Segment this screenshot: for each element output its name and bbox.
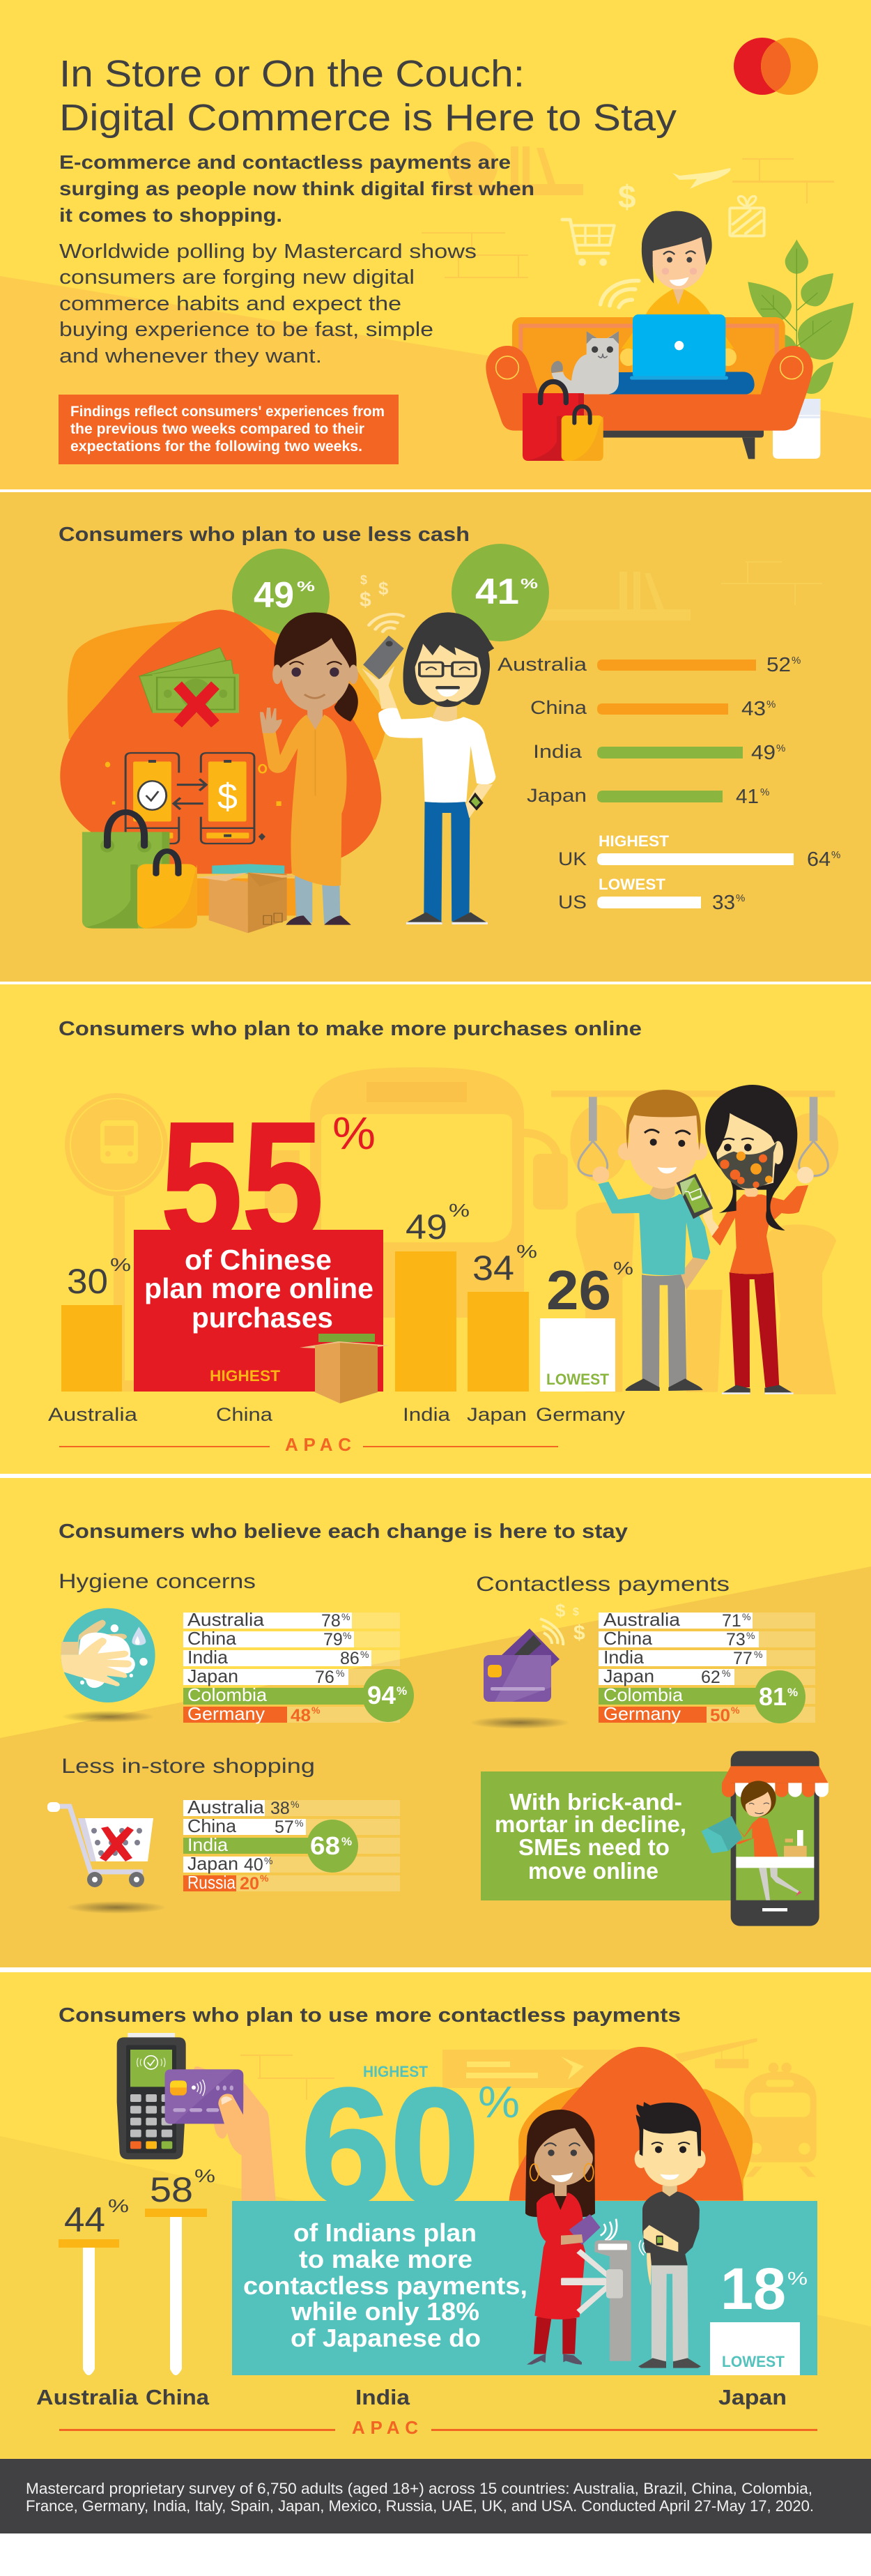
APAC bracket <box>59 2417 817 2438</box>
panel: contactless payments <box>0 1972 871 2459</box>
bar chart: less cash by country: 64 <box>807 848 831 871</box>
APAC bracket: APAC <box>285 1434 351 1455</box>
bar: China: % <box>194 2165 215 2186</box>
subtitle: E-commerce and contactless payments are <box>59 151 511 173</box>
panel: less cash <box>0 492 871 982</box>
icon: hand washing <box>61 1608 155 1723</box>
table: hygiene concerns: Japan <box>187 1666 238 1686</box>
table: less in-store shopping: % <box>264 1855 272 1866</box>
table: contactless payments: Australia <box>603 1609 681 1630</box>
bar: India: 49 <box>406 1207 447 1247</box>
table: contactless payments: 62 <box>701 1668 720 1687</box>
cat <box>551 331 619 395</box>
bar chart: less cash by country: 52 <box>766 654 791 676</box>
bar chart: less cash by country <box>498 654 840 914</box>
table: contactless payments: % <box>754 1649 762 1660</box>
subheading: Less in-store shopping <box>61 1755 315 1778</box>
axis labels: China <box>146 2385 210 2409</box>
bar: Germany lowest: 26 <box>546 1259 611 1321</box>
table: contactless payments: 73 <box>726 1630 746 1649</box>
bar: India <box>395 1200 470 1392</box>
table: less in-store shopping: 68 <box>310 1831 340 1860</box>
illustration: man with phone <box>362 612 495 924</box>
table: less in-store shopping: China <box>187 1815 237 1836</box>
bar: India: % <box>449 1200 470 1221</box>
icon: payment terminal with card <box>117 2033 276 2201</box>
table: hygiene concerns: % <box>396 1684 407 1698</box>
bar chart: less cash by country: Australia <box>498 654 587 675</box>
bar chart: less cash by country: % <box>831 849 840 861</box>
heading: Consumers who believe each change is here to stay <box>59 1521 628 1543</box>
icon: airplane and dollar: $ <box>618 178 636 215</box>
icon: dollar on phone screen: $ <box>217 777 238 817</box>
table: contactless payments: Germany <box>603 1703 681 1724</box>
background: train and blob <box>509 2038 817 2201</box>
subtitle: it comes to shopping. <box>59 204 282 226</box>
axis labels: India <box>355 2385 410 2409</box>
icon: contactless card: $ <box>573 1606 579 1618</box>
table: contactless payments: % <box>787 1686 798 1699</box>
table: less in-store shopping: 57 <box>275 1817 294 1837</box>
intro text <box>59 241 477 367</box>
icon: shopping bags <box>82 812 197 929</box>
table: contactless payments: 50 <box>710 1706 730 1725</box>
table: hygiene concerns: % <box>341 1611 350 1622</box>
bar: Australia <box>59 2195 129 2375</box>
table: hygiene concerns: 94 <box>367 1681 396 1709</box>
table: contactless payments: 71 <box>722 1611 741 1631</box>
bar chart: less cash by country: 33 <box>712 892 735 914</box>
icon: dollar signs: $ <box>360 573 367 587</box>
callout: findings note: the previous two weeks compared to their <box>70 421 364 437</box>
stat: India highest 60% <box>232 2055 817 2375</box>
table: contactless payments: % <box>742 1611 750 1622</box>
subheading: Contactless payments <box>476 1573 730 1596</box>
table: hygiene concerns: Colombia <box>187 1684 268 1705</box>
man with smartwatch <box>635 2102 706 2368</box>
table: less in-store shopping: % <box>341 1835 352 1848</box>
bar chart: less cash by country: LOWEST <box>599 876 666 893</box>
icon: cardboard box <box>196 864 299 933</box>
axis labels: Australia <box>48 1404 138 1425</box>
table: hygiene concerns: India <box>187 1647 229 1668</box>
heading: Consumers who plan to use more contactless payments <box>59 2004 681 2027</box>
bar chart: less cash by country: % <box>766 699 776 710</box>
bar: China highest: HIGHEST <box>210 1367 281 1385</box>
bar chart: less cash by country: 49 <box>751 742 776 764</box>
bar: Australia: % <box>108 2195 129 2216</box>
stat: India highest 60%: % <box>478 2077 520 2127</box>
table: hygiene concerns: 78 <box>321 1611 341 1631</box>
bar chart: less cash by country: % <box>760 786 769 798</box>
panel: here to stay <box>0 1478 871 1967</box>
callout: SMEs need to move online: With brick-and- <box>509 1789 682 1815</box>
icon: dollar signs: $ <box>360 588 371 611</box>
axis labels: Germany <box>536 1404 626 1425</box>
icon: phones exchanging payment <box>105 753 282 844</box>
table: contactless payments: % <box>746 1630 755 1641</box>
table: contactless payments: 81 <box>759 1682 787 1711</box>
table: contactless payments: China <box>603 1628 653 1649</box>
table: less in-store shopping: % <box>295 1817 303 1829</box>
axis labels <box>48 1404 626 1425</box>
turnstile <box>561 2240 631 2361</box>
bar: China highest: 55 <box>161 1087 323 1277</box>
straps <box>578 1097 828 1176</box>
panel: intro <box>0 0 871 489</box>
table: contactless payments: India <box>603 1647 645 1668</box>
bar: Japan: 34 <box>472 1249 514 1288</box>
intro text: Worldwide polling by Mastercard shows <box>59 241 477 263</box>
bar chart: less cash by country: % <box>776 742 785 754</box>
icon: contactless card <box>470 1600 585 1729</box>
table: less in-store shopping: % <box>260 1873 269 1884</box>
callout: SMEs need to move online <box>481 1771 739 1900</box>
bar: China highest <box>134 1087 383 1392</box>
table: hygiene concerns: China <box>187 1628 237 1649</box>
axis labels: Japan <box>467 1404 527 1425</box>
stat: India highest 60%: contactless payments, <box>243 2271 527 2300</box>
background: bus stop and bus <box>65 1067 568 1392</box>
table: less in-store shopping <box>183 1797 400 1893</box>
axis labels: Japan <box>718 2385 787 2409</box>
table: hygiene concerns: 48 <box>291 1706 311 1725</box>
stat: India highest 60%: while only 18% <box>291 2297 479 2326</box>
footer: survey note: Mastercard proprietary survey of 6,750 adults (aged 18+) across 15 countries: Australia, Brazil, China, Colombia, <box>26 2480 812 2497</box>
bar: China highest: plan more online <box>144 1272 373 1304</box>
icon: wifi <box>369 614 403 632</box>
stat: India highest 60%: HIGHEST <box>363 2063 429 2080</box>
bar: Japan <box>468 1241 537 1392</box>
icon: airplane and dollar <box>618 168 731 215</box>
icons: cart, gift and wifi <box>562 196 764 307</box>
table: less in-store shopping: 20 <box>240 1874 259 1893</box>
bar chart: less cash by country: HIGHEST <box>599 832 670 850</box>
stat: India highest 60%: of Japanese do <box>291 2324 481 2352</box>
woman <box>702 1085 814 1394</box>
icon: dollar signs <box>360 573 389 611</box>
table: hygiene concerns: % <box>336 1668 344 1679</box>
intro text: commerce habits and expect the <box>59 293 401 315</box>
background: rail sign and line <box>240 2050 624 2100</box>
bar: Germany lowest: LOWEST <box>546 1371 610 1388</box>
callout: findings note: Findings reflect consumers' experiences from <box>70 404 385 420</box>
icon: phone storefront <box>702 1751 828 1926</box>
axis labels: India <box>403 1404 451 1425</box>
table: less in-store shopping: India <box>187 1834 229 1855</box>
stat: Japan lowest 18% <box>710 2256 808 2375</box>
bar: Germany lowest <box>540 1258 633 1392</box>
heading: Consumers who plan to use less cash <box>59 524 470 546</box>
stat: India highest 60%: of Indians plan <box>293 2218 477 2247</box>
stat: India highest 60%: to make more <box>299 2245 472 2273</box>
stat: woman 49% <box>232 549 330 646</box>
intro text: consumers are forging new digital <box>59 266 415 289</box>
stat: woman 49%: % <box>297 579 315 595</box>
title: Digital Commerce is Here to Stay <box>59 97 677 139</box>
subtitle: surging as people now think digital first when <box>59 178 534 199</box>
woman paying <box>525 2110 617 2365</box>
axis labels: China <box>216 1404 273 1425</box>
stat: man 41%: 41 <box>475 572 519 612</box>
title <box>59 53 677 139</box>
intro text: and whenever they want. <box>59 345 322 367</box>
bar: Australia <box>61 1254 131 1392</box>
table: contactless payments: Colombia <box>603 1684 684 1705</box>
stat: woman 49%: 49 <box>254 575 294 616</box>
bar chart: less cash by country: % <box>736 892 745 904</box>
table: contactless payments: 77 <box>733 1649 753 1668</box>
person <box>608 211 755 395</box>
background blob <box>60 609 387 915</box>
icon: shopping cart crossed out <box>47 1802 167 1914</box>
bar: Australia: 44 <box>64 2200 105 2239</box>
title: In Store or On the Couch: <box>59 53 525 95</box>
subtitle <box>59 151 534 226</box>
bar: Australia: 30 <box>67 1262 108 1301</box>
stat: India highest 60%: 60 <box>301 2055 479 2239</box>
table: contactless payments <box>599 1609 815 1725</box>
table: hygiene concerns: % <box>360 1649 369 1660</box>
callout: SMEs need to move online: move online <box>528 1858 658 1884</box>
bar chart: less cash by country: 41 <box>736 786 759 808</box>
table: less in-store shopping: 40 <box>244 1855 263 1875</box>
bar chart: less cash by country: 43 <box>741 698 766 720</box>
heading: Consumers who plan to make more purchases online <box>59 1018 642 1040</box>
table: hygiene concerns: % <box>311 1705 321 1716</box>
bar: China <box>145 2165 215 2375</box>
shopping bags <box>523 381 603 461</box>
stat: Japan lowest 18%: 18 <box>720 2256 786 2322</box>
bar: Germany lowest: % <box>613 1258 633 1279</box>
couch back <box>512 317 785 459</box>
callout: SMEs need to move online: SMEs need to <box>518 1834 670 1860</box>
footer: survey note <box>0 2459 871 2533</box>
icon: parcel box <box>300 1334 390 1403</box>
icon: contactless card: $ <box>573 1622 585 1645</box>
intro text: buying experience to be fast, simple <box>59 319 433 341</box>
table: hygiene concerns: 86 <box>340 1649 360 1668</box>
illustration: woman on couch <box>486 196 854 461</box>
illustration: woman <box>260 612 358 925</box>
bar chart: less cash by country: % <box>792 655 801 666</box>
table: less in-store shopping: Australia <box>187 1797 265 1817</box>
bar: China highest: purchases <box>192 1302 333 1334</box>
bar: China highest: of Chinese <box>185 1244 332 1276</box>
table: contactless payments: % <box>722 1668 730 1679</box>
table: hygiene concerns: 79 <box>323 1630 343 1649</box>
bar: Japan: % <box>516 1241 537 1262</box>
table: hygiene concerns: Germany <box>187 1703 265 1724</box>
table: hygiene concerns: 76 <box>315 1668 334 1687</box>
table: less in-store shopping: % <box>291 1799 299 1810</box>
table: hygiene concerns: % <box>343 1630 351 1641</box>
background silhouettes <box>551 1090 838 1394</box>
stat: Japan lowest 18%: % <box>787 2268 808 2289</box>
stat: man 41%: % <box>521 577 538 592</box>
logo: Mastercard <box>734 38 818 95</box>
callout: findings note: expectations for the following two weeks. <box>70 439 362 455</box>
panel: online purchases <box>0 984 871 1474</box>
subheading: Hygiene concerns <box>59 1570 256 1593</box>
phone with cart <box>677 1173 713 1219</box>
callout: SMEs need to move online: mortar in decline, <box>495 1811 686 1837</box>
stat: Japan lowest 18%: LOWEST <box>722 2353 785 2370</box>
bar chart: less cash by country: China <box>530 697 587 718</box>
bar: China: 58 <box>150 2170 193 2209</box>
table: contactless payments: % <box>731 1705 740 1716</box>
icon: cash crossed out <box>139 648 239 727</box>
illustration: people at turnstile <box>525 2102 706 2368</box>
axis labels: Australia <box>36 2385 139 2409</box>
bar: China highest: % <box>332 1107 376 1159</box>
stat: man 41% <box>452 544 549 641</box>
table: hygiene concerns: Australia <box>187 1609 265 1630</box>
axis labels <box>36 2385 787 2409</box>
bar chart: less cash by country: UK <box>558 848 587 869</box>
table: less in-store shopping: Japan <box>187 1853 238 1874</box>
illustration: couple on transit <box>551 1085 838 1394</box>
callout: findings note <box>59 395 399 464</box>
table: contactless payments: Japan <box>603 1666 654 1686</box>
illustration: people, cash and phones <box>60 609 495 933</box>
icon: contactless card: $ <box>555 1600 566 1621</box>
bar: Australia: % <box>110 1254 131 1275</box>
footer: survey note: France, Germany, India, Italy, Spain, Japan, Mexico, Russia, UAE, UK, and USA. Conducted April 27-May 17, 2020. <box>26 2497 814 2515</box>
table: hygiene concerns <box>183 1609 414 1725</box>
icon: dollar signs: $ <box>378 578 389 599</box>
APAC bracket: APAC <box>352 2417 418 2438</box>
couch seat <box>486 346 813 431</box>
table: less in-store shopping: 38 <box>270 1799 290 1818</box>
table: less in-store shopping: Russia <box>187 1872 236 1893</box>
bar chart: less cash by country: India <box>533 741 583 762</box>
bar chart: less cash by country: US <box>558 892 587 913</box>
man <box>592 1090 710 1391</box>
bar chart: less cash by country: Japan <box>527 785 587 806</box>
plant <box>748 239 854 459</box>
